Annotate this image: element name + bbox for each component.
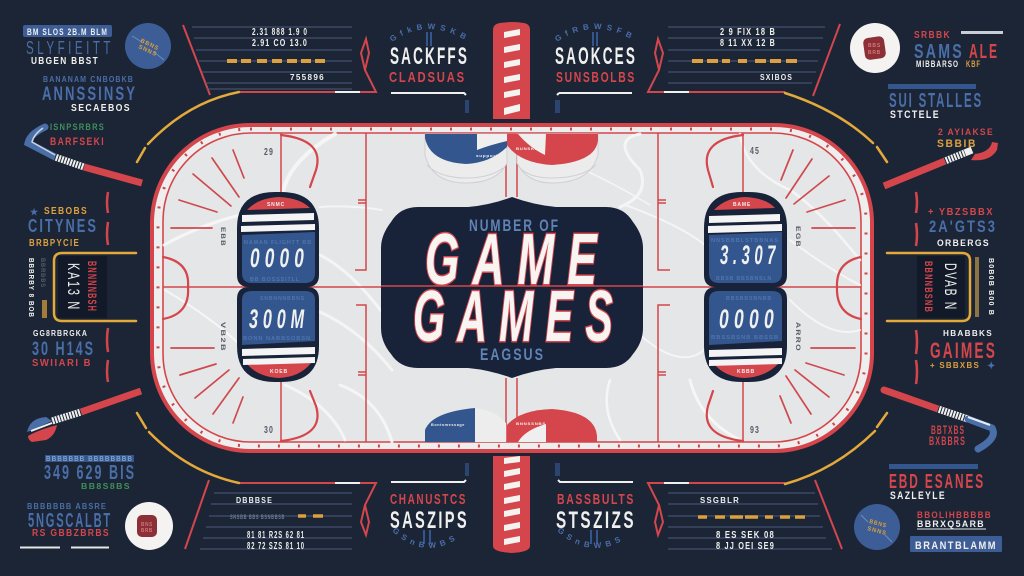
- right bottom text block: BRANTBLAMM: [915, 540, 997, 552]
- right text block two: SBBIB: [937, 138, 977, 150]
- bottom center left heading: SASZIPS: [390, 507, 469, 534]
- icon: white puck bottom left: [125, 502, 173, 550]
- right text block four: [916, 329, 997, 384]
- left text block five: BB8S8BS: [81, 482, 131, 491]
- rink numbers: 93: [750, 425, 760, 436]
- left text block three: ★: [30, 207, 40, 217]
- top center right heading: [555, 23, 637, 113]
- top center left heading: G f k B W S K B: [390, 23, 466, 41]
- right top text block: ALE: [969, 41, 999, 63]
- right text block five: BXBBRS: [929, 434, 966, 448]
- left top text block: [23, 25, 114, 67]
- left text block two: SECAEBOS: [71, 103, 131, 114]
- right text block five: BBTXBS: [931, 423, 965, 437]
- right bottom text block: BBOLIHBBBBB: [917, 510, 992, 520]
- left goal box: [27, 256, 107, 318]
- top right stats panel: 2 9 FIX 18 B: [720, 27, 776, 38]
- right goal box: B0B0B B00 B: [987, 258, 994, 316]
- icon: blue puck top left: [125, 23, 171, 69]
- top center right heading: SUNSBOLBS: [556, 69, 636, 86]
- bottom center left heading: CHANUSTCS: [390, 491, 467, 508]
- right top text block: SAMS: [914, 41, 964, 63]
- left text block four: [32, 328, 108, 382]
- scoreboard top left: BB BOSSSITLL: [250, 277, 300, 283]
- right goal box: [917, 256, 994, 318]
- bottom faceoff pucks: Bontsmessage: [431, 422, 465, 427]
- right text block four: HBABBKS: [943, 329, 993, 338]
- top right stats panel: SXIBOS: [760, 73, 793, 82]
- scoreboard top left: 0000: [250, 243, 309, 273]
- icon: white puck bottom left: BRB: [141, 528, 153, 534]
- right text block four: ✦: [987, 361, 997, 372]
- left text block two: ANNSSINSY: [42, 84, 137, 105]
- right text block three: [916, 192, 997, 248]
- bottom right stats panel: 8 ES SEK 08: [716, 530, 775, 541]
- top faceoff pucks: supporter: [476, 153, 504, 158]
- top left stats panel: 2.91 CO 13.0: [252, 38, 308, 49]
- bottom center right heading: STSZIZS: [556, 507, 636, 534]
- bottom center left heading: [390, 463, 469, 548]
- top center left heading: CLADSUAS: [389, 69, 466, 86]
- left text block three: CITYNES: [28, 216, 98, 236]
- icon: white puck top right: BBS: [868, 43, 881, 49]
- scoreboard top right: NNSBBBLSTBBNAS: [711, 238, 779, 244]
- left text block two: BARFSEKI: [50, 136, 105, 148]
- scoreboard top right: BBSB BBSBNSLN: [716, 276, 772, 282]
- bottom right stats panel: SSGBLR: [700, 496, 740, 505]
- right goal box: BBNNBSNB: [922, 261, 934, 313]
- icon: hockey stick top left: [28, 127, 142, 183]
- left text block three: [28, 192, 108, 249]
- bottom faceoff pucks: BNNSSNBS: [516, 421, 546, 426]
- scoreboard bottom left: 300M: [249, 304, 309, 334]
- bottom center right heading: [555, 463, 636, 548]
- top left stats panel: 2.31 888 1.9 0: [252, 27, 308, 38]
- left goal box: BNNNNBSH: [85, 261, 99, 312]
- left goal box: BBBRBY 8 BOB: [27, 258, 34, 318]
- icon: hockey stick top right: [884, 142, 998, 186]
- top center right heading: SAOKCES: [555, 43, 637, 70]
- top right stats panel: [668, 27, 825, 83]
- icon: white puck bottom left: BNS: [141, 522, 153, 528]
- left text block two: [42, 75, 137, 148]
- rink numbers: ARRO: [794, 322, 800, 352]
- top right stats panel: 8 11 XX 12 B: [720, 38, 776, 49]
- icon: white puck top right: [850, 23, 900, 73]
- left top text block: SLYFIEITT: [26, 38, 114, 58]
- icon: blue puck bottom right: BBNS: [868, 519, 887, 530]
- left text block five: 349 629 BIS: [44, 462, 136, 484]
- bottom left stats panel: DBBBSE: [236, 496, 273, 505]
- left text block three: BRBPYCIE: [29, 238, 80, 249]
- left text block four: GG8RBRGKA: [33, 329, 88, 338]
- rink numbers: EBB: [219, 227, 225, 247]
- right top text block: MIBBARSO: [916, 59, 959, 69]
- left text block six: 5NGSCALBT: [28, 510, 112, 532]
- icon: hockey stick bottom right: [884, 390, 993, 449]
- top left stats panel: 755896: [290, 73, 325, 82]
- bottom left stats panel: 81 81 R2S 62 81: [247, 530, 305, 541]
- rink numbers: 29: [264, 147, 274, 158]
- rink numbers: 45: [750, 146, 760, 157]
- top left stats panel: [192, 27, 352, 89]
- rink numbers: VB2B: [219, 322, 225, 352]
- right top text block: KBF: [966, 59, 981, 69]
- right text block two: 2 AYIAKSE: [938, 127, 994, 137]
- icon: blue puck top left: BBNS: [139, 38, 160, 52]
- rink numbers: EGB: [794, 226, 800, 248]
- tagline: EAGSUS: [480, 345, 545, 364]
- bottom right stats panel: [668, 493, 832, 552]
- title line one: GAME: [425, 220, 610, 300]
- scoreboard bottom right: 0000: [719, 304, 779, 334]
- scoreboard bottom right: BBSBBSBNBB: [726, 296, 772, 302]
- scoreboard top left: [237, 192, 319, 287]
- bottom center right heading: BASSBULTS: [557, 491, 635, 508]
- bottom center right heading: G S n B W B S: [558, 528, 620, 548]
- left text block six: RS GBBZBRBS: [32, 528, 110, 539]
- scoreboard bottom right: [704, 287, 787, 382]
- left text block six: BBBBBBB ABSRE: [27, 502, 107, 511]
- title line two: GAMES: [413, 277, 625, 357]
- bottom center left heading: G S n B W B S: [393, 528, 454, 548]
- icon: blue puck bottom right: [854, 504, 900, 550]
- right top text block: [914, 30, 1003, 69]
- left goal box: KA13 N: [64, 263, 83, 311]
- scoreboard bottom left: BONN NABBSOBSN: [243, 336, 311, 342]
- left text block three: SEBOBS: [44, 206, 88, 217]
- left text block four: 30 H14S: [32, 339, 95, 360]
- right text block three: ORBERGS: [937, 238, 990, 248]
- right text block five: SAZLEYLE: [890, 490, 946, 502]
- right goal box: DVAB N: [941, 263, 960, 311]
- right text block two: STCTELE: [890, 109, 940, 121]
- left top text block: BM SLOS 2B.M BLM: [27, 27, 108, 37]
- scoreboard top right: BAME: [733, 202, 751, 208]
- scoreboard top left: NAMAN FLIGHTT BB: [244, 240, 312, 246]
- top faceoff pucks: BUNSKNRS: [516, 146, 546, 151]
- bottom left stats panel: [200, 493, 352, 552]
- scoreboard bottom left: KOEB: [270, 369, 288, 375]
- icon: blue puck top left: SNNS: [137, 44, 158, 58]
- ice rays: [171, 150, 855, 423]
- bottom faceoff pucks: [425, 408, 597, 442]
- icon: white puck top right: BRB: [868, 50, 881, 56]
- icon: blue puck bottom right: SNNS: [866, 526, 887, 537]
- left text block five: [44, 455, 136, 491]
- left text block five: BBBBBBB BBBBBBBB: [46, 456, 133, 463]
- rink: [150, 123, 874, 453]
- right text block four: + SBBXBS: [930, 361, 980, 370]
- right bottom text block: [910, 510, 1002, 552]
- right bottom text block: BBRXQ5ARB: [917, 519, 985, 529]
- icon: hockey stick bottom left: [27, 391, 141, 442]
- left goal box: BBRBBS: [39, 258, 45, 288]
- rink numbers: 30: [264, 425, 274, 436]
- scoreboard bottom right: KBBB: [737, 369, 755, 375]
- top center right heading: G f R B W S F B: [555, 23, 632, 41]
- right text block three: 2A'GTS3: [929, 217, 997, 236]
- scoreboard bottom right: BBSSBSNB BBSSB: [711, 335, 779, 341]
- scoreboard top right: 3.307: [720, 240, 780, 270]
- bottom right stats panel: 8 JJ OEI SE9: [716, 541, 775, 552]
- striped post bottom: [493, 456, 530, 553]
- scoreboard top left: SNMC: [267, 202, 285, 208]
- rink numbers: [219, 146, 800, 436]
- scoreboard bottom left: [237, 287, 319, 382]
- left text block two: BANANAM CNBOBKB: [43, 75, 134, 84]
- left top text block: UBGEN BBST: [31, 56, 99, 67]
- center title badge: [381, 197, 643, 378]
- top faceoff pucks: [425, 134, 598, 183]
- scoreboard top right: [704, 192, 787, 287]
- right text block two: [888, 84, 994, 150]
- bottom left stats panel: 82 72 SZS 81 10: [247, 541, 305, 552]
- top center left heading: [389, 23, 469, 113]
- right text block three: + YBZSBBX: [928, 207, 994, 218]
- left text block six: [20, 502, 112, 548]
- right text block five: [889, 423, 985, 502]
- subtitle: NUMBER OF: [469, 216, 560, 235]
- left text block four: SWIIARI B: [32, 358, 92, 369]
- right top text block: SRBBK: [914, 30, 951, 41]
- left text block two: ISNPSRBRS: [50, 122, 105, 132]
- scoreboard bottom left: SNBNNNBBNS: [260, 296, 305, 302]
- top center left heading: SACKFFS: [390, 43, 469, 70]
- striped post top: [493, 22, 530, 119]
- bottom left stats panel: SNSBB BBS BSNBBSB: [230, 515, 285, 521]
